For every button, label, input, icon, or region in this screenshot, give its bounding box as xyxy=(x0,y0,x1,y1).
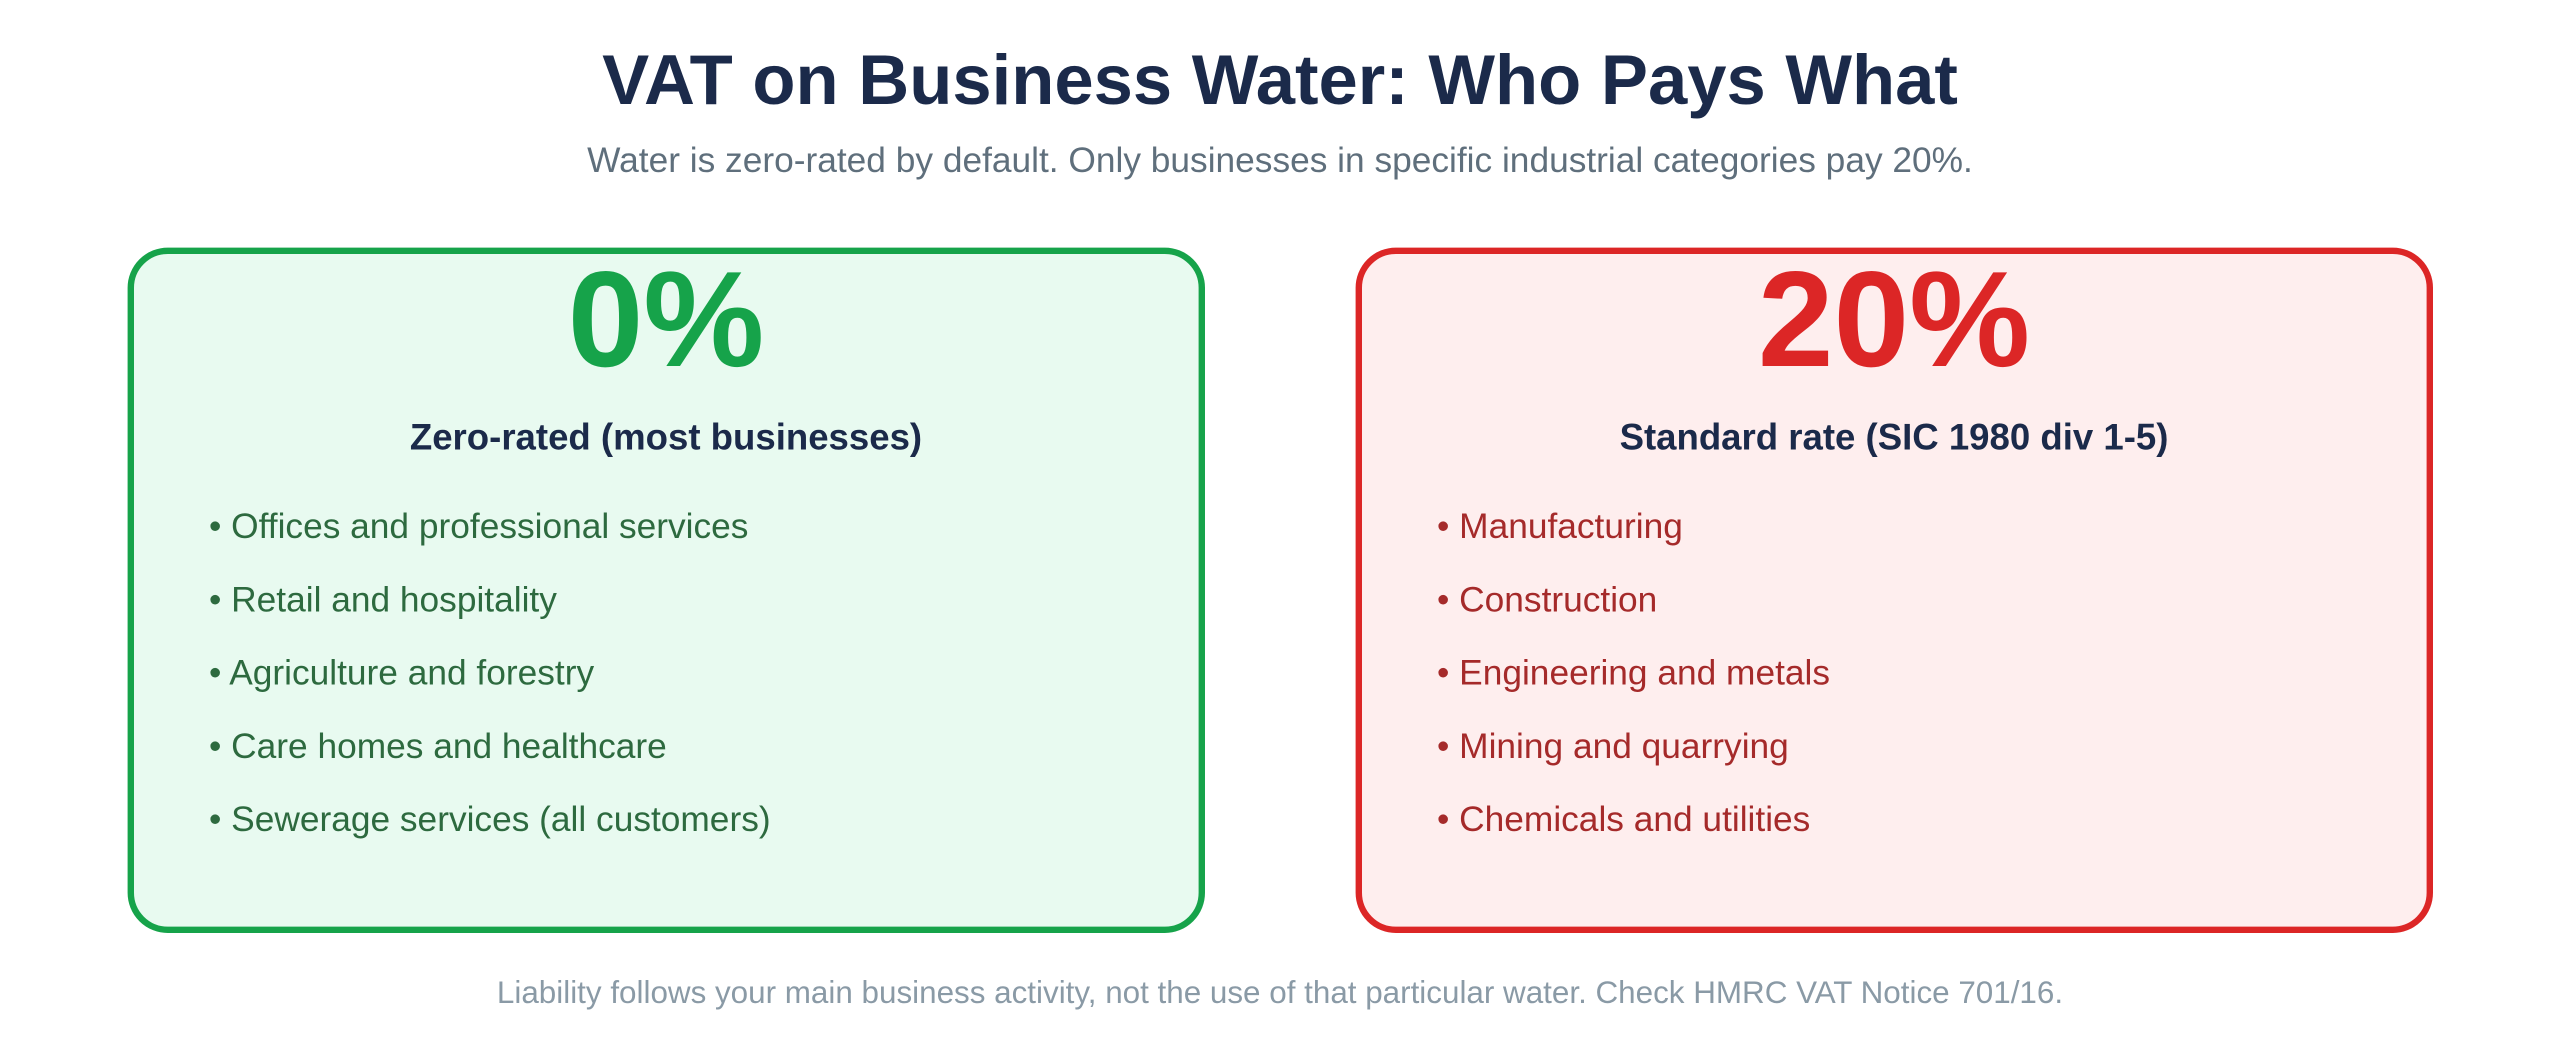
list: standard-rated categories xyxy=(1437,507,1830,839)
list: zero-rated categories: • Retail and hospitality xyxy=(209,580,557,619)
panel heading: standard rate: Standard rate (SIC 1980 div 1-5) xyxy=(1620,416,2168,458)
panel background: green card xyxy=(131,251,1202,930)
panel: standard rate xyxy=(1359,243,2430,930)
panel heading: zero-rated: Zero-rated (most businesses) xyxy=(410,416,922,458)
list: standard-rated categories: • Chemicals and utilities xyxy=(1437,800,1810,839)
list: zero-rated categories: • Offices and professional services xyxy=(209,507,748,546)
title: VAT on Business Water: Who Pays What xyxy=(602,40,1958,119)
panel: zero-rated xyxy=(131,243,1202,930)
big rate: 0%: 0% xyxy=(568,243,764,395)
list: zero-rated categories: • Agriculture and forestry xyxy=(209,654,594,693)
footer note: Liability follows your main business activity, not the use of that particular water. Check HMRC VAT Notice 701/16. xyxy=(497,975,2063,1010)
list: zero-rated categories: • Care homes and healthcare xyxy=(209,727,667,766)
list: zero-rated categories xyxy=(209,507,771,839)
list: standard-rated categories: • Engineering and metals xyxy=(1437,654,1830,693)
list: standard-rated categories: • Manufacturing xyxy=(1437,507,1683,546)
panel background: red card xyxy=(1359,251,2430,930)
list: standard-rated categories: • Construction xyxy=(1437,580,1657,619)
list: standard-rated categories: • Mining and quarrying xyxy=(1437,727,1789,766)
subtitle: Water is zero-rated by default. Only businesses in specific industrial categories pay 20%. xyxy=(587,141,1973,180)
big rate: 20%: 20% xyxy=(1758,243,2030,395)
list: zero-rated categories: • Sewerage services (all customers) xyxy=(209,800,771,839)
